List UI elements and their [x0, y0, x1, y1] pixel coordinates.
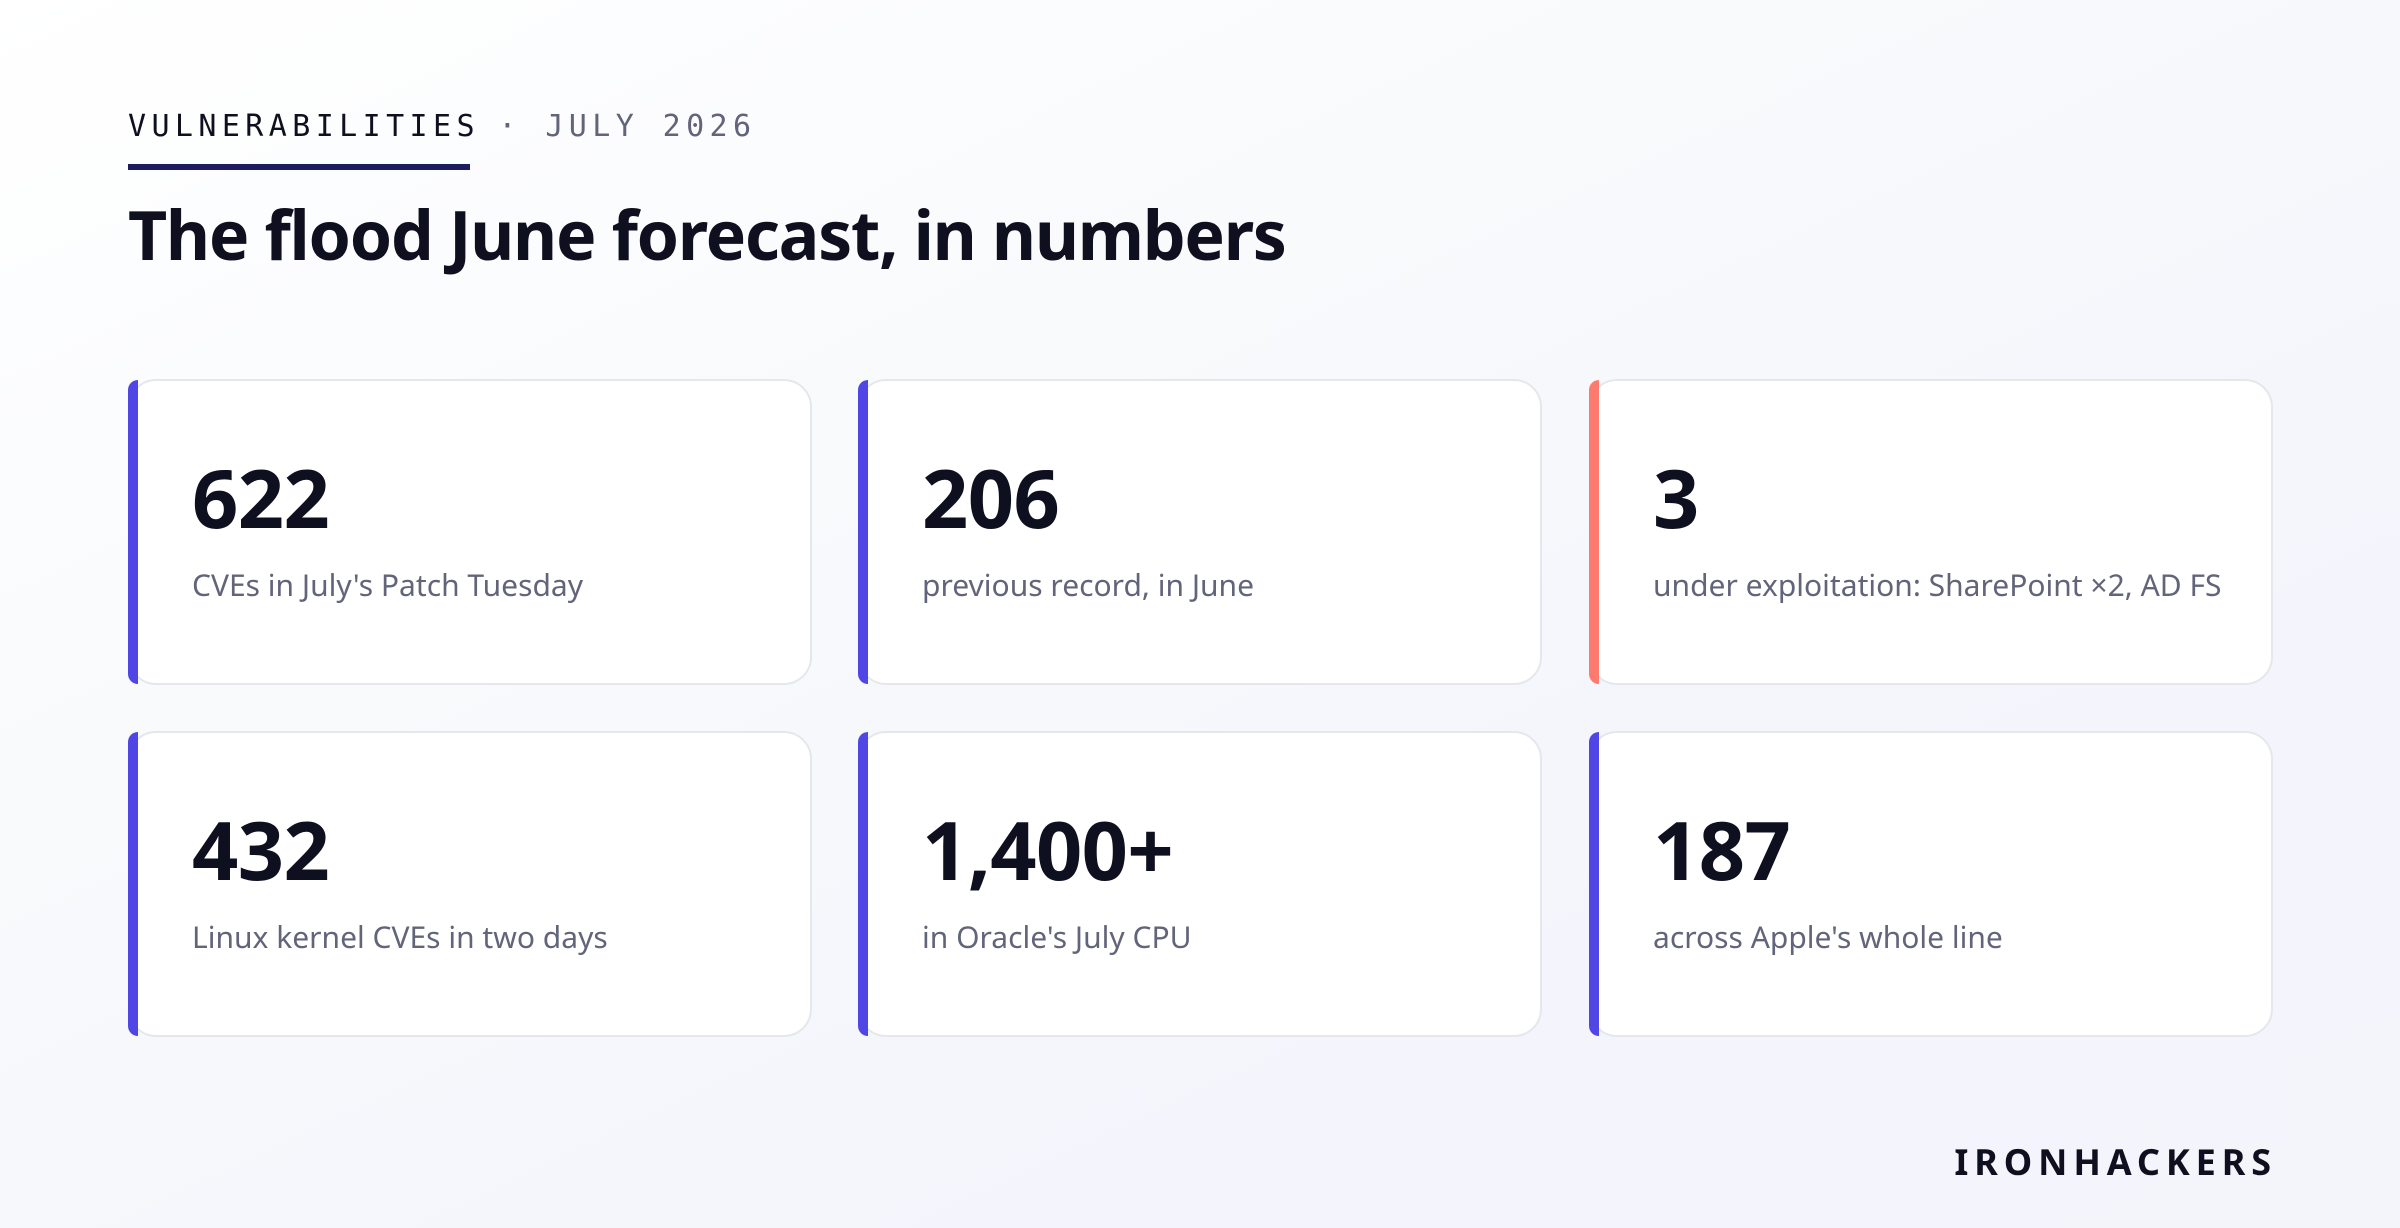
panel: 3 under exploitation — [1589, 379, 2273, 685]
stat label: previous record, in June — [922, 564, 1254, 605]
stat label: in Oracle's July CPU — [922, 916, 1192, 957]
panel: 622 CVEs — [128, 379, 812, 685]
stat label: under exploitation: SharePoint ×2, AD FS — [1653, 564, 2222, 605]
eyebrow: VULNERABILITIES · JULY 2026 — [128, 109, 756, 144]
stat value: 3 — [1653, 441, 1699, 552]
title: The flood June forecast, in numbers — [128, 187, 1286, 280]
stat label: CVEs in July's Patch Tuesday — [192, 564, 583, 605]
brand wordmark: IRONHACKERS — [1954, 1137, 2277, 1186]
eyebrow underline — [128, 164, 470, 170]
panel: 1,400+ Oracle — [858, 731, 1542, 1037]
stat value: 206 — [922, 441, 1059, 552]
stat value: 187 — [1653, 793, 1790, 904]
panel: 206 previous record — [858, 379, 1542, 685]
stat label: across Apple's whole line — [1653, 916, 2003, 957]
stat value: 1,400+ — [922, 793, 1173, 904]
stat label: Linux kernel CVEs in two days — [192, 916, 608, 957]
stat value: 622 — [192, 441, 329, 552]
stat value: 432 — [192, 793, 329, 904]
panel: 187 Apple — [1589, 731, 2273, 1037]
panel: 432 Linux kernel — [128, 731, 812, 1037]
